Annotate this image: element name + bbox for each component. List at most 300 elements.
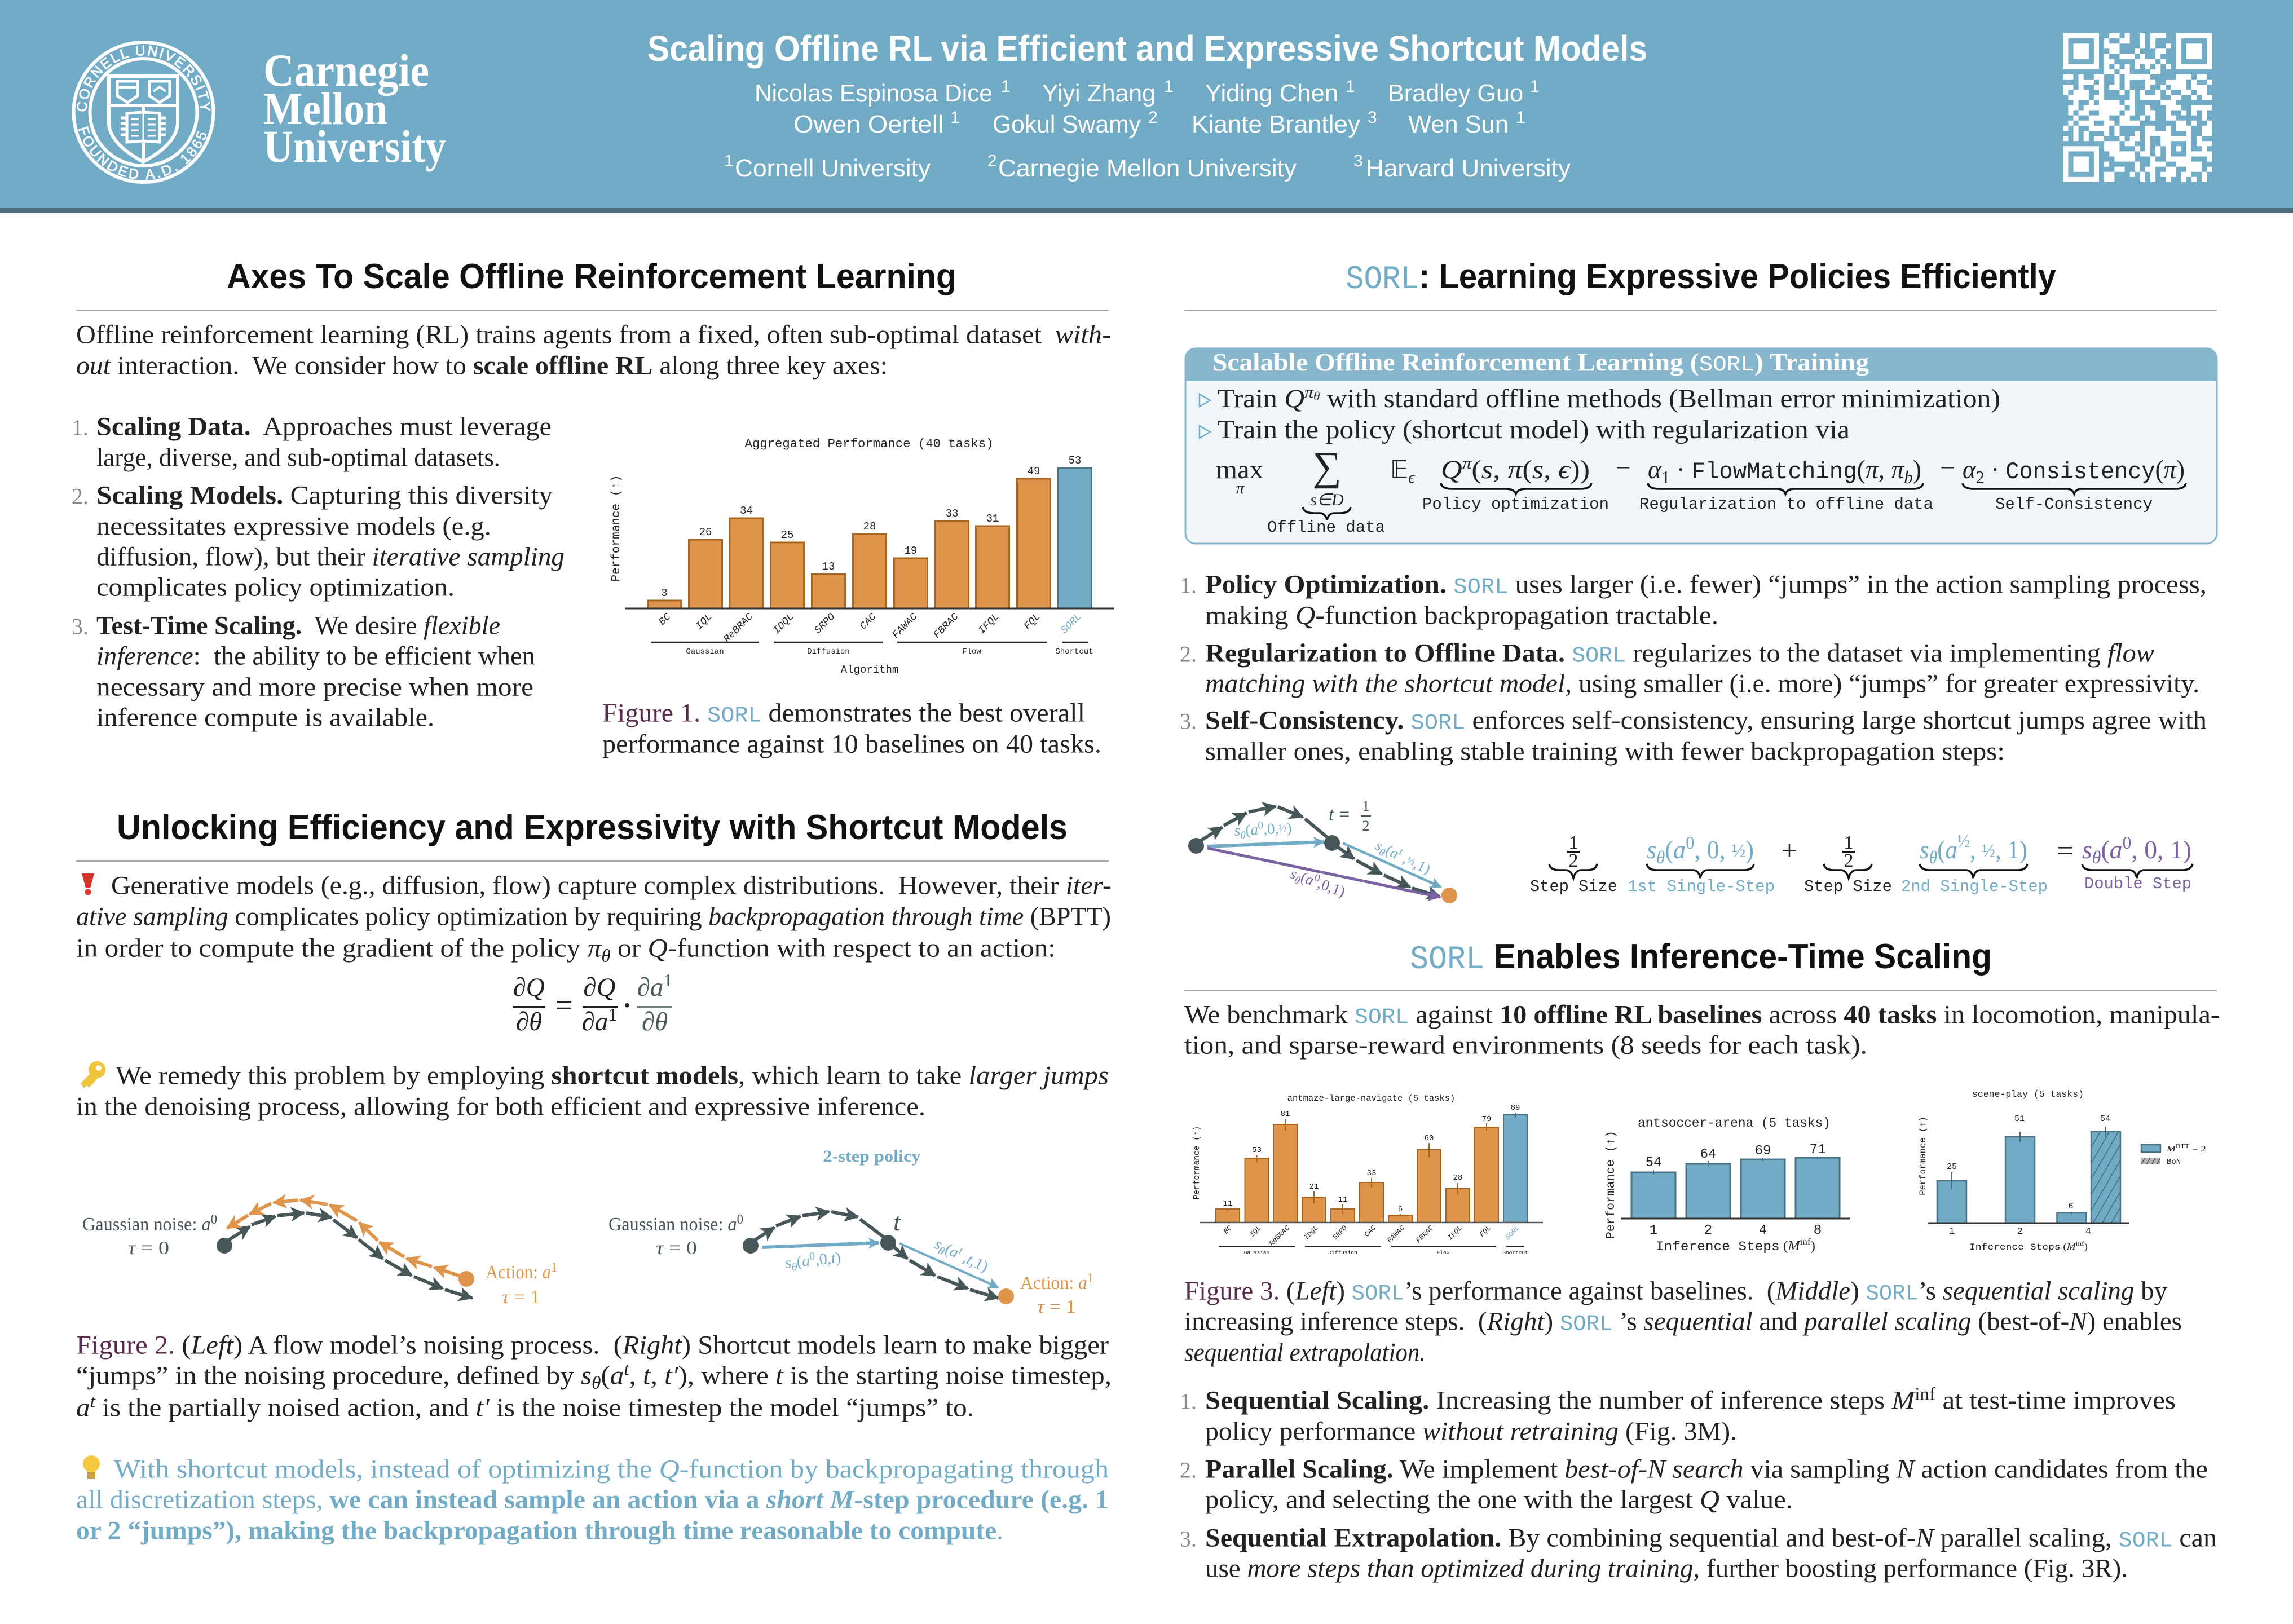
equation: self-consistency: a: [2110, 835, 2122, 864]
diagram: self-consistency jumps: ,1): [1411, 855, 1434, 877]
bar chart: antsoccer-arena: 8: [1814, 1223, 1822, 1238]
bar chart: aggregated performance: 25: [781, 529, 793, 541]
diagram: shortcut model 2-step policy: ,0,: [814, 1250, 832, 1269]
problem paragraph: ative sampling complicates policy optimization by requiring backpropagation through time (BPTT): [76, 902, 1111, 932]
equation: self-consistency: 1st Single-Step: [1628, 877, 1775, 896]
diagram: flow model noising process: τ = 0: [128, 1238, 169, 1259]
diagram: self-consistency jumps: (: [1245, 822, 1251, 839]
equation: chain rule gradient: ∂Q: [583, 973, 616, 1002]
bar chart: aggregated performance: Performance (↑): [610, 475, 623, 582]
equation: chain rule gradient: 1: [608, 1004, 617, 1025]
diagram: self-consistency jumps: t =: [1329, 804, 1350, 825]
logo: Carnegie Mellon University wordmark: Carnegie: [263, 45, 429, 96]
equation: chain rule gradient: ∂θ: [642, 1007, 668, 1036]
numbered list: three axes: large, diverse, and sub-optimal datasets.: [96, 443, 500, 473]
intro text: Offline reinforcement learning (RL) trains agents from a fixed, often sub-optimal dataset with-: [76, 320, 1111, 350]
poster title: Scaling Offline RL via Efficient and Expressive Shortcut Models: [647, 28, 1647, 69]
diagram: self-consistency jumps: s: [1373, 836, 1386, 854]
bar chart: antmaze-large-navigate: IFQL: [1447, 1224, 1464, 1242]
diagram: self-consistency jumps: ,: [1397, 848, 1411, 867]
bar chart: aggregated performance: 49: [1028, 465, 1040, 478]
figure 2 caption: θ: [592, 1373, 601, 1393]
numbered list: three axes: inference compute is available.: [96, 703, 434, 732]
diagram: self-consistency jumps: [1188, 798, 1457, 903]
authors: 1: [950, 108, 960, 127]
problem paragraph: or: [611, 934, 648, 963]
numbered list: three axes: necessary and more precise when more: [96, 672, 533, 701]
QR code: [2063, 33, 2212, 182]
figure 3 caption: Figure 3. (Left) SORL’s performance against baselines. (Middle) SORL’s sequential scaling by: [1184, 1277, 2167, 1306]
objective formula: ): [1913, 455, 1921, 484]
equation: self-consistency: (: [2101, 835, 2110, 864]
authors: 2: [1148, 108, 1158, 127]
objective formula: FlowMatching(π, π: [1691, 455, 1905, 486]
objective formula: α: [1648, 455, 1662, 484]
bar chart: antmaze-large-navigate: [1193, 1093, 1543, 1256]
diagram: shortcut model 2-step policy: θ: [936, 1245, 947, 1258]
equation: chain rule gradient: ∂θ: [516, 1007, 542, 1036]
objective formula: Regularization to offline data: [1639, 495, 1933, 514]
bar chart: antmaze-large-navigate: 89: [1511, 1104, 1520, 1113]
numbered list: three axes: 2.: [72, 484, 89, 509]
bar chart: aggregated performance: FQL: [1022, 611, 1043, 632]
objective formula: ·: [1985, 455, 2005, 484]
bar chart: aggregated performance: 34: [740, 505, 753, 517]
diagram: self-consistency jumps: 0: [1258, 819, 1264, 832]
box title: Scalable Offline Reinforcement Learning ( SORL) Training: [1212, 348, 1869, 377]
diagram: shortcut model 2-step policy: 0: [737, 1212, 743, 1227]
bar chart: antmaze-large-navigate: 28: [1453, 1173, 1462, 1182]
equation: self-consistency: , 1): [1995, 835, 2027, 864]
equation: self-consistency: θ: [1656, 847, 1665, 867]
bar chart: antmaze-large-navigate: ReBRAC: [1268, 1224, 1291, 1248]
bar chart: aggregated performance: ReBRAC: [722, 611, 756, 645]
panel: SORL Learning Expressive Policies Efficiently: [1180, 257, 2217, 903]
bar chart: antsoccer-arena: [1604, 1116, 1850, 1254]
equation: self-consistency: 2: [1844, 850, 1853, 871]
logo: Carnegie Mellon University wordmark: University: [263, 121, 446, 172]
equation: self-consistency: =: [2057, 835, 2074, 867]
diagram: shortcut model 2-step policy: τ = 1: [1037, 1296, 1076, 1317]
bar chart: aggregated performance: 28: [863, 520, 876, 533]
benchmark paragraph: [1184, 1000, 2220, 1060]
equation: self-consistency: 0: [2122, 832, 2131, 853]
diagram: self-consistency jumps: θ: [1240, 829, 1246, 841]
diagram: shortcut model 2-step policy: (: [796, 1253, 803, 1271]
bar chart: aggregated performance: IFQL: [977, 611, 1002, 637]
bar chart: antsoccer-arena: 54: [1646, 1155, 1661, 1171]
numbered list: scaling modes: use more steps than optimized during training, further boosting performance (Fig. 3R).: [1205, 1554, 2128, 1583]
bar chart: antsoccer-arena: 64: [1700, 1147, 1716, 1162]
bullet list: Train Q: [1218, 384, 1303, 413]
authors: Gokul Swamy: [993, 111, 1141, 138]
equation: self-consistency: s: [2082, 835, 2092, 864]
bar chart: antmaze-large-navigate: BC: [1222, 1224, 1234, 1235]
bar chart: antmaze-large-navigate: 53: [1252, 1146, 1262, 1155]
diagram: flow model noising process: [82, 1200, 557, 1308]
intro text: out interaction. We consider how to scale offline RL along three key axes:: [76, 351, 888, 380]
training algorithm box: [1185, 348, 2217, 544]
diagram: shortcut model 2-step policy: Action: a: [1020, 1273, 1088, 1294]
bar chart: scene-play: Performance (↑): [1918, 1116, 1928, 1195]
authors: 1: [1001, 77, 1011, 96]
equation: chain rule gradient: =: [555, 988, 573, 1023]
numbered list: scaling modes: at test-time improves: [1935, 1386, 2176, 1415]
objective formula: Self-Consistency: [1995, 495, 2153, 514]
objective formula: ∑: [1312, 444, 1342, 489]
figure 2 caption: t, t′), where t is the starting noise timestep,: [643, 1361, 1098, 1391]
diagram: shortcut model 2-step policy: t,1): [964, 1251, 991, 1276]
bar chart: scene-play: 51: [2014, 1114, 2025, 1124]
affiliations: 2: [987, 152, 997, 170]
equation: self-consistency: Step Size: [1530, 877, 1617, 896]
diagram: shortcut model 2-step policy: 0: [809, 1250, 815, 1263]
objective formula: π: [1462, 454, 1472, 473]
authors: Yiding Chen: [1205, 80, 1338, 107]
numbered list: SORL components: making Q-function backpropagation tractable.: [1205, 601, 1718, 630]
authors: 1: [1516, 108, 1525, 127]
diagram: shortcut model 2-step policy: a: [801, 1252, 811, 1270]
bar chart: antsoccer-arena: 71: [1810, 1142, 1825, 1158]
figure 2 caption: Figure 2. (Left) A flow model’s noising process. ( Right) Shortcut models learn to make bigger: [76, 1331, 1109, 1360]
diagram: self-consistency jumps: ): [1286, 819, 1292, 836]
diagram: self-consistency jumps: 2: [1362, 818, 1369, 834]
bar chart: antmaze-large-navigate: FBRAC: [1414, 1224, 1435, 1245]
panel: Unlocking Efficiency and Expressivity with Shortcut Models: [76, 808, 1112, 1545]
heading: unlocking efficiency: Unlocking Efficiency and Expressivity with Shortcut Models: [117, 808, 1068, 847]
objective formula: ϵ: [1408, 468, 1416, 487]
diagram: shortcut model 2-step policy: ,: [957, 1247, 972, 1266]
figure 1 caption: Figure 1. SORL demonstrates the best overall: [602, 698, 1085, 729]
bar chart: aggregated performance: FAWAC: [890, 611, 920, 641]
numbered list: SORL components: Self-Consistency. SORL enforces self-consistency, ensuring large shortcut jumps agree with: [1205, 706, 2207, 735]
figure 3 caption: increasing inference steps. (Right) SORL ’s sequential and parallel scaling (best-of-N) enables: [1184, 1307, 2182, 1336]
bar chart: antsoccer-arena: antsoccer-arena (5 tasks): [1638, 1116, 1831, 1131]
numbered list: scaling modes: Parallel Scaling. We implement best-of-N search via sampling N action candidates from the: [1205, 1455, 2208, 1484]
bar chart: scene-play: 25: [1947, 1162, 1957, 1172]
callout: shortcut backpropagation takeaway: all discretization steps, we can instead sample an action via a short M-step procedure (e.g. 1: [76, 1485, 1109, 1515]
equation: self-consistency: s: [1920, 835, 1929, 864]
figure 2 caption: a: [76, 1393, 90, 1422]
diagram: shortcut model 2-step policy: τ = 0: [656, 1238, 697, 1259]
equation: chain rule gradient: ∂a: [637, 973, 663, 1002]
chart legend: BTT: [2176, 1144, 2189, 1150]
figure 2 caption: t: [624, 1359, 630, 1379]
bar chart: antmaze-large-navigate: Flow: [1437, 1250, 1450, 1256]
bar chart: scene-play: 4: [2085, 1226, 2091, 1237]
numbered list: SORL components: 1.: [1180, 573, 1197, 598]
objective formula: −: [1616, 453, 1631, 483]
diagram: self-consistency jumps: s: [1234, 822, 1241, 839]
panel: Axes To Scale Offline Reinforcement Learning: [72, 257, 1114, 759]
equation: chain rule gradient: [513, 970, 672, 1036]
bar chart: antmaze-large-navigate: 79: [1482, 1115, 1491, 1124]
bar chart: antmaze-large-navigate: SRPO: [1331, 1224, 1349, 1242]
problem paragraph: Q-function with respect to an action:: [648, 934, 1038, 963]
bullet list: θ: [1313, 389, 1320, 403]
bar chart: aggregated performance: Shortcut: [1055, 647, 1093, 656]
bar chart: antmaze-large-navigate: FAWAC: [1386, 1224, 1406, 1245]
numbered list: scaling modes: policy, and selecting the one with the largest Q value.: [1205, 1485, 1793, 1515]
objective formula: α: [1963, 455, 1977, 484]
numbered list: scaling modes: inf: [1915, 1384, 1936, 1404]
equation: self-consistency: Double Step: [2084, 875, 2191, 893]
equation: self-consistency: , 0, 1): [2131, 835, 2191, 864]
figure 2 caption: (: [601, 1361, 610, 1391]
authors: Wen Sun: [1408, 111, 1509, 138]
bar chart: scene-play: [1918, 1089, 2206, 1252]
heading: inference-time scaling: SORL Enables Inference-Time Scaling: [1410, 937, 1992, 978]
affiliations: 3: [1353, 152, 1363, 170]
diagram: self-consistency jumps: θ: [1377, 846, 1387, 859]
icon: key: [81, 1061, 105, 1088]
bar chart: aggregated performance: CAC: [858, 611, 879, 632]
authors: Bradley Guo: [1388, 80, 1523, 107]
figure 2 caption: a: [610, 1361, 624, 1391]
intro text: [76, 320, 1111, 380]
solution paragraph: [76, 1061, 1109, 1121]
diagram: self-consistency jumps: (: [1299, 868, 1309, 886]
chart legend: BoN: [2167, 1158, 2181, 1167]
problem paragraph: [76, 871, 1112, 965]
bar chart: aggregated performance: 3: [661, 587, 668, 599]
objective formula: 2: [1976, 467, 1985, 487]
objective formula: π: [1236, 479, 1245, 497]
numbered list: scaling modes: policy performance without retraining (Fig. 3M).: [1205, 1416, 1737, 1446]
bar chart: aggregated performance: 13: [822, 561, 835, 573]
affiliations: Harvard University: [1366, 155, 1571, 182]
numbered list: scaling modes: Sequential Scaling. Increasing the number of inference steps M: [1205, 1386, 1914, 1415]
numbered list: three axes: 3.: [72, 614, 89, 639]
numbered list: three axes: Scaling Models. Capturing this diversity: [96, 480, 553, 510]
figure 2 caption: t′ is the noise timestep the model “jumps” to.: [476, 1393, 953, 1422]
bar chart: aggregated performance: IQL: [694, 611, 715, 632]
bar chart: antsoccer-arena: 69: [1755, 1144, 1771, 1159]
bar chart: antmaze-large-navigate: 21: [1309, 1182, 1319, 1191]
bar chart: antsoccer-arena: ): [1811, 1239, 1815, 1254]
numbered list: scaling modes: Sequential Extrapolation. By combining sequential and best-of- N parallel scaling, SORL can: [1205, 1524, 2217, 1553]
figure 2 caption: is the partially noised action, and: [95, 1393, 476, 1422]
equation: self-consistency: 0: [1686, 832, 1694, 853]
equation: chain rule gradient: ∂a: [582, 1007, 608, 1036]
diagram: self-consistency jumps: a: [1250, 821, 1259, 838]
bar chart: antmaze-large-navigate: 6: [1398, 1205, 1403, 1214]
equation: self-consistency: ): [1745, 835, 1754, 864]
chart legend: [2141, 1144, 2206, 1167]
diagram: flow model noising process: Action: a: [486, 1262, 552, 1283]
authors: [755, 77, 1540, 138]
logo: Carnegie Mellon University wordmark: Mellon: [263, 83, 387, 134]
bar chart: antmaze-large-navigate: SORL: [1504, 1224, 1522, 1242]
chart legend: = 2: [2189, 1145, 2206, 1154]
numbered list: scaling modes: [1180, 1384, 2217, 1583]
equation: self-consistency: ½: [1982, 841, 1995, 862]
diagram: shortcut model 2-step policy: s: [932, 1235, 945, 1254]
diagram: shortcut model 2-step policy: Gaussian noise: a: [608, 1214, 737, 1235]
numbered list: SORL components: 2.: [1180, 642, 1197, 667]
equation: self-consistency: , 0,: [1694, 835, 1732, 864]
equation: self-consistency: a: [1673, 835, 1686, 864]
bar chart: aggregated performance: 53: [1069, 454, 1081, 467]
affiliations: 1: [724, 152, 734, 170]
problem paragraph: Generative models (e.g., diffusion, flow) capture complex distributions. However, their iter-: [111, 871, 1112, 900]
solution paragraph: in the denoising process, allowing for both efficient and expressive inference.: [76, 1092, 925, 1121]
diagram: flow model noising process: τ = 1: [502, 1287, 540, 1308]
bar chart: aggregated performance: FBRAC: [932, 611, 961, 641]
bar chart: aggregated performance: 31: [986, 513, 999, 525]
figure 2 caption: t: [90, 1391, 96, 1411]
diagram: shortcut model 2-step policy: a: [947, 1243, 962, 1262]
diagram: self-consistency jumps: 1: [1362, 798, 1369, 814]
objective formula: 𝔼: [1390, 456, 1408, 484]
numbered list: SORL components: Regularization to Offline Data. SORL regularizes to the dataset via implementing flow: [1205, 638, 2154, 669]
equation: self-consistency: [1530, 831, 2193, 896]
equation: self-consistency: ½: [1732, 841, 1745, 862]
diagram: self-consistency jumps: ½: [1278, 822, 1287, 835]
problem paragraph: in order to compute the gradient of the policy π: [76, 934, 601, 963]
callout: shortcut backpropagation takeaway: or 2 “jumps”), making the backpropagation through time reasonable to compute .: [76, 1516, 1003, 1545]
figure 2 caption: “jumps” in the noising procedure, defined by s: [76, 1361, 591, 1391]
equation: self-consistency: ½: [1957, 831, 1970, 851]
objective formula: −: [1940, 453, 1955, 483]
header banner: [0, 0, 2293, 213]
solution paragraph: We remedy this problem by employing shortcut models, which learn to take larger jumps: [116, 1061, 1109, 1091]
bar chart: scene-play: Inference Steps (M: [1969, 1241, 2075, 1252]
numbered list: three axes: Test-Time Scaling. We desire flexible: [96, 611, 500, 641]
affiliations: [724, 152, 1571, 182]
authors: 1: [1346, 77, 1355, 96]
equation: chain rule gradient: ·: [623, 991, 632, 1020]
figure 1 caption: [602, 698, 1101, 759]
bar chart: scene-play: ): [2084, 1241, 2088, 1252]
callout: shortcut backpropagation takeaway: With shortcut models, instead of optimizing the Q-function by backpropagating through: [114, 1455, 1109, 1484]
equation: chain rule gradient: 1: [663, 970, 672, 990]
bar chart: aggregated performance: Algorithm: [841, 664, 898, 676]
diagram: self-consistency jumps: ,0,1): [1316, 875, 1347, 900]
figure 1 caption: performance against 10 baselines on 40 tasks.: [602, 730, 1101, 759]
bar chart: aggregated performance: 19: [905, 545, 917, 557]
bar chart: aggregated performance: Aggregated Performance (40 tasks): [744, 437, 994, 451]
bullet list: π: [1304, 383, 1314, 401]
diagram: self-consistency jumps: a: [1387, 844, 1402, 862]
bar chart: antmaze-large-navigate: 33: [1367, 1169, 1376, 1178]
diagram: self-consistency jumps: ½: [1405, 854, 1417, 868]
figure 2 caption: ,: [629, 1361, 643, 1391]
icon: light bulb: [83, 1455, 100, 1479]
bar chart: aggregated performance: 26: [699, 526, 712, 539]
numbered list: three axes: 1.: [72, 415, 89, 440]
bar chart: aggregated performance: SORL: [1059, 611, 1084, 637]
benchmark paragraph: tion, and sparse-reward environments (8 seeds for each task).: [1184, 1031, 1867, 1060]
diagram: self-consistency jumps: s: [1288, 864, 1299, 882]
objective formula: Policy optimization: [1422, 495, 1609, 514]
equation: self-consistency: 1: [1844, 832, 1853, 853]
bar chart: antmaze-large-navigate: antmaze-large-navigate (5 tasks): [1287, 1093, 1455, 1104]
chart legend: M: [2166, 1145, 2177, 1154]
bar chart: antsoccer-arena: 2: [1704, 1223, 1712, 1238]
bar chart: antmaze-large-navigate: 60: [1425, 1134, 1434, 1143]
diagram: self-consistency jumps: a: [1303, 870, 1316, 889]
numbered list: three axes: inference: the ability to be efficient when: [96, 642, 535, 671]
numbered list: SORL components: smaller ones, enabling stable training with fewer backpropagation steps:: [1205, 736, 2005, 766]
bar chart: aggregated performance: [610, 437, 1114, 676]
authors: 1: [1164, 77, 1174, 96]
diagram: shortcut model 2-step policy: [608, 1147, 1093, 1317]
objective formula: ·: [1670, 455, 1691, 484]
authors: 3: [1368, 108, 1377, 127]
diagram: self-consistency jumps: θ: [1293, 874, 1302, 887]
authors: Nicolas Espinosa Dice: [755, 80, 993, 107]
objective formula: [1216, 444, 2186, 537]
equation: self-consistency: (: [1665, 835, 1673, 864]
diagram: shortcut model 2-step policy: 1: [1087, 1271, 1093, 1286]
logo: Cornell University seal: CORNELL UNIVERSITY: [77, 45, 211, 112]
bar chart: antmaze-large-navigate: Gaussian: [1244, 1250, 1269, 1256]
bar chart: antsoccer-arena: Inference Steps (M: [1656, 1239, 1799, 1254]
bar chart: antsoccer-arena: Performance (↑): [1604, 1131, 1618, 1239]
figure 3 caption: sequential extrapolation.: [1184, 1338, 1426, 1367]
diagram: self-consistency jumps: t: [1397, 846, 1405, 858]
bar chart: aggregated performance: IDQL: [771, 611, 796, 637]
objective formula: Offline data: [1267, 518, 1385, 537]
equation: self-consistency: +: [1782, 835, 1797, 866]
callout: shortcut backpropagation takeaway: [76, 1455, 1109, 1545]
objective formula: s, π(s, ϵ)): [1481, 455, 1588, 484]
numbered list: scaling modes: 1.: [1180, 1388, 1197, 1414]
bar chart: antmaze-large-navigate: Performance (↑): [1193, 1126, 1202, 1199]
diagram: flow model noising process: Gaussian noise: a: [82, 1214, 211, 1235]
authors: 1: [1530, 77, 1540, 96]
numbered list: scaling modes: 3.: [1180, 1526, 1197, 1552]
panel: SORL Enables Inference-Time Scaling: [1180, 937, 2220, 1583]
equation: self-consistency: a: [1945, 835, 1957, 864]
logo: Carnegie Mellon University wordmark: [263, 45, 446, 172]
affiliations: Carnegie Mellon University: [998, 155, 1297, 182]
bar chart: scene-play: 6: [2068, 1202, 2074, 1211]
diagram: self-consistency jumps: ,0,: [1263, 820, 1279, 837]
bar chart: scene-play: inf: [2076, 1239, 2084, 1247]
bar chart: antsoccer-arena: 1: [1650, 1223, 1657, 1238]
numbered list: three axes: diffusion, flow), but their iterative sampling: [96, 542, 565, 572]
numbered list: SORL components: 3.: [1180, 708, 1197, 734]
objective formula: s∈D: [1310, 491, 1344, 509]
icon: red exclamation: [82, 873, 94, 895]
objective formula: Q: [1441, 455, 1462, 484]
bar chart: antmaze-large-navigate: CAC: [1363, 1224, 1378, 1239]
logo: Cornell University seal: FOUNDED A.D. 1865: [78, 126, 206, 180]
bar chart: aggregated performance: Diffusion: [807, 647, 850, 656]
diagram: shortcut model 2-step policy: t): [830, 1249, 841, 1267]
authors: Owen Oertell: [793, 111, 943, 138]
diagram: flow model noising process: 0: [211, 1212, 217, 1227]
bar chart: aggregated performance: Gaussian: [686, 647, 724, 656]
bar chart: antmaze-large-navigate: FQL: [1478, 1224, 1493, 1239]
bar chart: antmaze-large-navigate: 11: [1223, 1199, 1232, 1208]
bar chart: aggregated performance: 33: [946, 508, 958, 520]
authors: Yiyi Zhang: [1042, 80, 1156, 107]
diagram: shortcut model 2-step policy: t: [957, 1245, 965, 1257]
equation: self-consistency: (: [1937, 835, 1945, 864]
objective formula: Consistency(π): [2005, 455, 2185, 486]
numbered list: SORL components: [1180, 570, 2207, 766]
bar chart: antmaze-large-navigate: IDQL: [1303, 1224, 1320, 1242]
diagram: flow model noising process: 1: [551, 1260, 557, 1275]
equation: self-consistency: θ: [2092, 847, 2101, 867]
authors: Kiante Brantley: [1192, 111, 1360, 138]
figure 2 caption: [76, 1331, 1112, 1422]
bullet list: [1200, 383, 2000, 444]
equation: self-consistency: 2: [1569, 850, 1578, 871]
